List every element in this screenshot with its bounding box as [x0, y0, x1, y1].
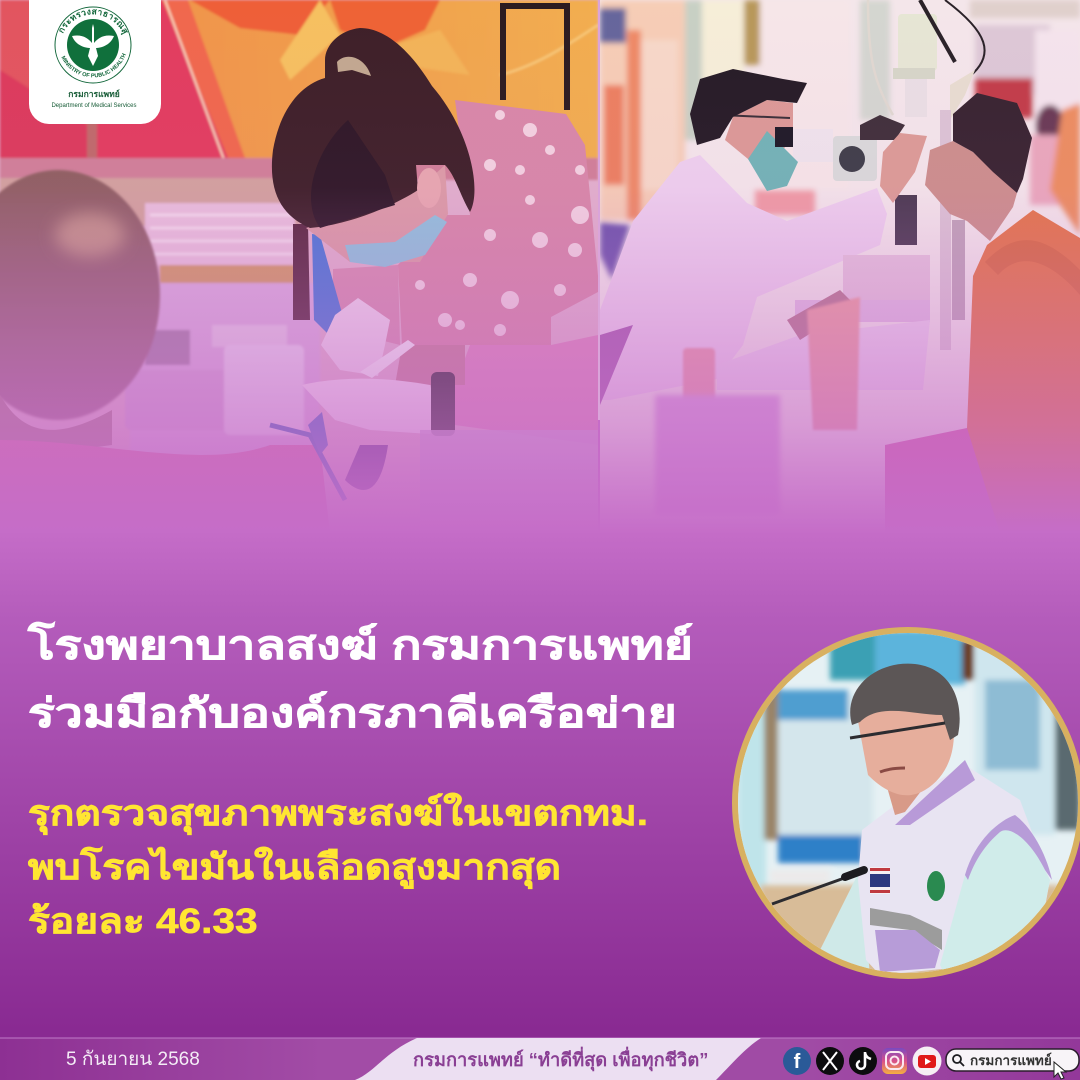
subheadline: yellow text: พบโรคไขมันในเลือดสูงมากสุด [28, 848, 561, 887]
mask [345, 215, 447, 267]
icon: youtube [912, 1046, 942, 1076]
portrait hair [850, 664, 960, 740]
vest [858, 765, 1050, 975]
doctor hair [690, 69, 807, 145]
flag [870, 867, 890, 894]
slogan: กรมการแพทย์ “ทำดีที่สุด เพื่อทุกชีวิต” [413, 1046, 708, 1072]
photo: nurse treating monk [0, 0, 598, 533]
top-to-bottom colour fade over photos [0, 0, 1080, 533]
coat [600, 155, 887, 400]
lilac panel [875, 930, 940, 972]
icon: tiktok [849, 1047, 877, 1075]
hand [880, 133, 927, 203]
search box: กรมการแพทย์ [970, 1052, 1052, 1068]
neck [888, 790, 920, 815]
headline: white title: ร่วมมือกับองค์กรภาคีเครือข่าย [28, 692, 677, 736]
icon: facebook: f [794, 1051, 801, 1073]
monk robe [0, 440, 326, 498]
doctor mask [748, 131, 798, 191]
headline: white title: โรงพยาบาลสงฆ์ กรมการแพทย์ [28, 624, 693, 668]
logo card [29, 0, 161, 124]
icon: instagram [882, 1048, 907, 1074]
slogan ribbon [355, 1038, 761, 1080]
hair [272, 28, 474, 228]
right sleeve [940, 820, 1050, 975]
photo: eye examination [600, 0, 1080, 533]
icon: X [816, 1047, 844, 1075]
face [306, 165, 448, 262]
watch [431, 372, 455, 436]
subheadline: yellow text: ร้อยละ 46.33 [28, 902, 258, 941]
icon: facebook [783, 1047, 811, 1075]
logo card: Department of Medical Services [51, 103, 137, 109]
ear [417, 168, 441, 208]
face [858, 710, 954, 796]
collar [895, 760, 975, 825]
ministry seal: MINISTRY OF PUBLIC HEALTH [62, 53, 126, 78]
luggage handle [503, 6, 567, 110]
gloves [321, 298, 390, 376]
shirt [398, 100, 598, 345]
subheadline: yellow text: รุกตรวจสุขภาพพระสงฆ์ในเขตกทม. [28, 794, 648, 833]
machine [898, 14, 937, 71]
ministry seal [54, 6, 132, 84]
robe [967, 210, 1080, 533]
monk face [925, 141, 1017, 241]
subheadline: yellow text [28, 792, 648, 941]
headline: white title [27, 621, 693, 736]
portrait photo [732, 620, 1080, 979]
foreground cards [807, 297, 860, 430]
left sleeve [820, 876, 870, 968]
blue strap [312, 234, 342, 333]
microphone [772, 870, 864, 904]
monk hair [953, 93, 1032, 193]
doctor face [725, 100, 793, 159]
search box [946, 1049, 1079, 1079]
monk head [0, 170, 160, 420]
arm [455, 335, 598, 430]
grey band [870, 908, 942, 950]
date: 5 กันยายน 2568 [66, 1049, 200, 1070]
footer bar [0, 1038, 1080, 1080]
badge [927, 871, 945, 901]
logo text: กรมการแพทย์ [68, 89, 120, 99]
